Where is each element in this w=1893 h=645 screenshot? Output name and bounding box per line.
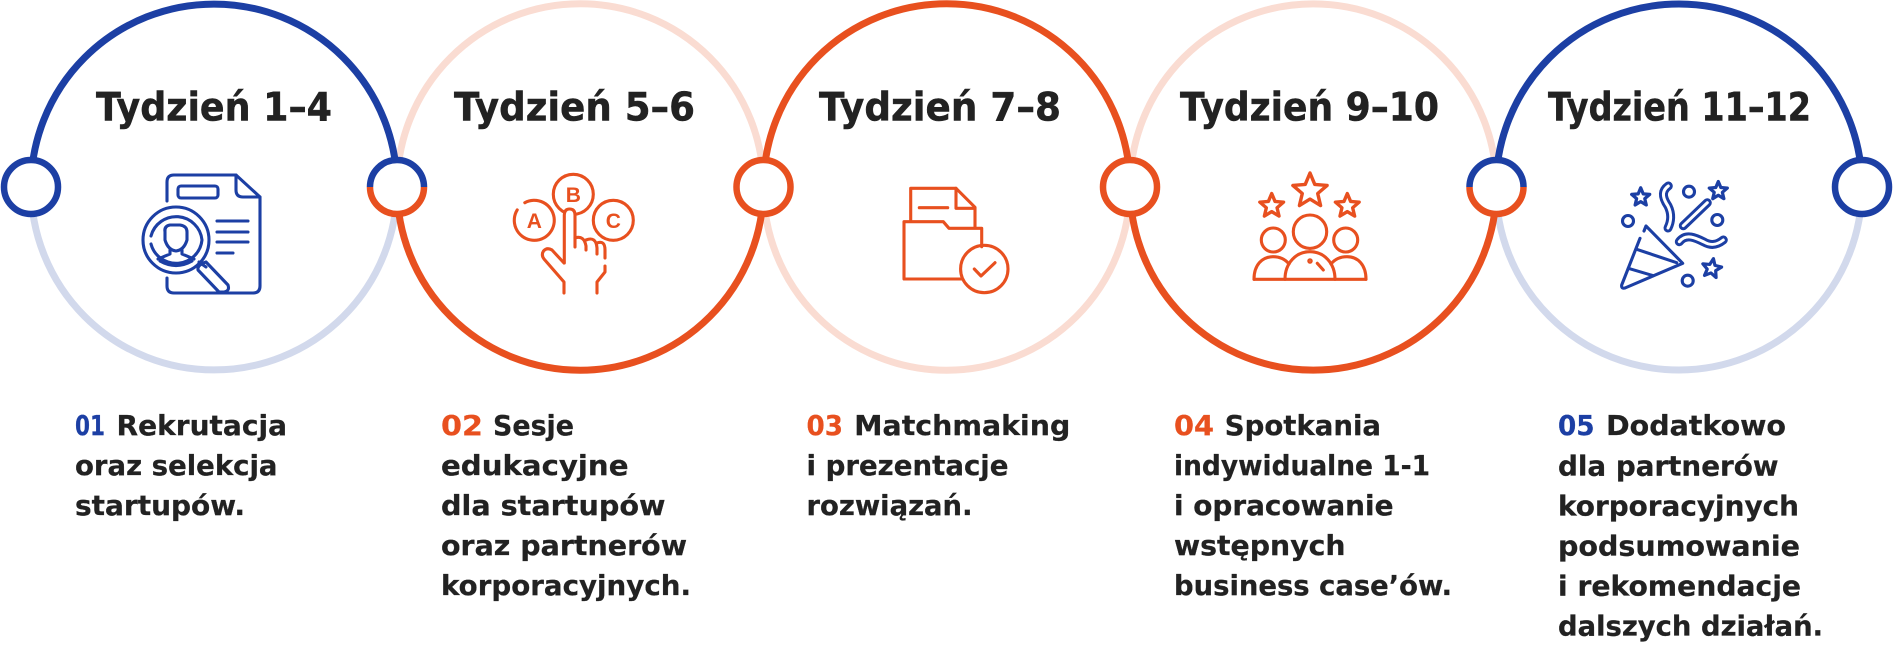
text: step 05: podsumowanie xyxy=(1558,530,1800,562)
pale circle arcs xyxy=(31,4,1862,370)
text: step 01 xyxy=(75,409,287,522)
text: step 04: wstępnych xyxy=(1174,529,1346,562)
text: step 05: dla partnerów xyxy=(1558,449,1778,482)
arc: week 11-12 xyxy=(1496,4,1862,187)
arc: week 1-4 xyxy=(31,4,397,187)
heading: week 1-4: Tydzień 1–4 xyxy=(96,86,332,130)
heading: week 11-12: Tydzień 11–12 xyxy=(1548,86,1811,130)
node 5 xyxy=(1470,160,1524,214)
icon: team with stars xyxy=(1254,173,1366,279)
text: step 05: korporacyjnych xyxy=(1558,489,1799,522)
icon: hand choosing A B C: B xyxy=(566,184,581,207)
text: step 02: 02 xyxy=(441,409,483,442)
node 4 xyxy=(1103,160,1157,214)
text: step 05: 05 xyxy=(1558,409,1594,442)
icon: folder with check mark xyxy=(904,188,1008,293)
text: step 03: Matchmaking xyxy=(854,409,1070,442)
text: step 04: 04 xyxy=(1174,409,1214,442)
text: step 01: 01 xyxy=(75,409,105,442)
node 1 xyxy=(4,160,58,214)
heading: week 5-6: Tydzień 5–6 xyxy=(454,86,695,130)
text: step 04: indywidualne 1-1 xyxy=(1174,449,1430,482)
icon: hand choosing A B C: A xyxy=(527,210,542,233)
node 3 xyxy=(736,160,790,214)
text: step 04: business case’ów. xyxy=(1174,569,1452,602)
text: step 04 xyxy=(1174,409,1452,602)
text: step 01: Rekrutacja xyxy=(116,409,287,442)
text: step 02: oraz partnerów xyxy=(441,529,687,562)
arc: week 7-8 xyxy=(764,4,1130,187)
text: step 05: dalszych działań. xyxy=(1558,610,1823,642)
text: step 03: rozwiązań. xyxy=(806,489,972,522)
text: step 03 xyxy=(806,409,1070,522)
icon: hand choosing A B C: C xyxy=(606,210,621,233)
node 6 xyxy=(1835,160,1889,214)
icon: hand choosing A B C xyxy=(514,174,633,293)
text: step 02: korporacyjnych. xyxy=(441,569,691,602)
heading: week 9-10: Tydzień 9–10 xyxy=(1180,86,1439,130)
text: step 05: Dodatkowo xyxy=(1606,409,1786,442)
arc: week 9-10 xyxy=(1130,187,1496,370)
text: step 05: i rekomendacje xyxy=(1558,570,1801,602)
node 2 xyxy=(370,160,424,214)
text: step 05 xyxy=(1558,409,1823,642)
arc: week 5-6 xyxy=(397,187,764,370)
text: step 01: oraz selekcja xyxy=(75,449,278,482)
text: step 02: Sesje xyxy=(493,409,574,442)
text: step 02 xyxy=(441,409,691,602)
icon: document with magnifier and person xyxy=(143,175,260,293)
heading: week 7-8: Tydzień 7–8 xyxy=(819,86,1061,130)
icon: party popper xyxy=(1622,182,1727,288)
text: step 03: i prezentacje xyxy=(806,449,1008,482)
text: step 04: Spotkania xyxy=(1225,409,1381,442)
text: step 01: startupów. xyxy=(75,489,245,522)
text: step 04: i opracowanie xyxy=(1174,489,1394,522)
text: step 02: edukacyjne xyxy=(441,449,628,482)
text: step 03: 03 xyxy=(806,409,843,442)
text: step 02: dla startupów xyxy=(441,489,666,522)
